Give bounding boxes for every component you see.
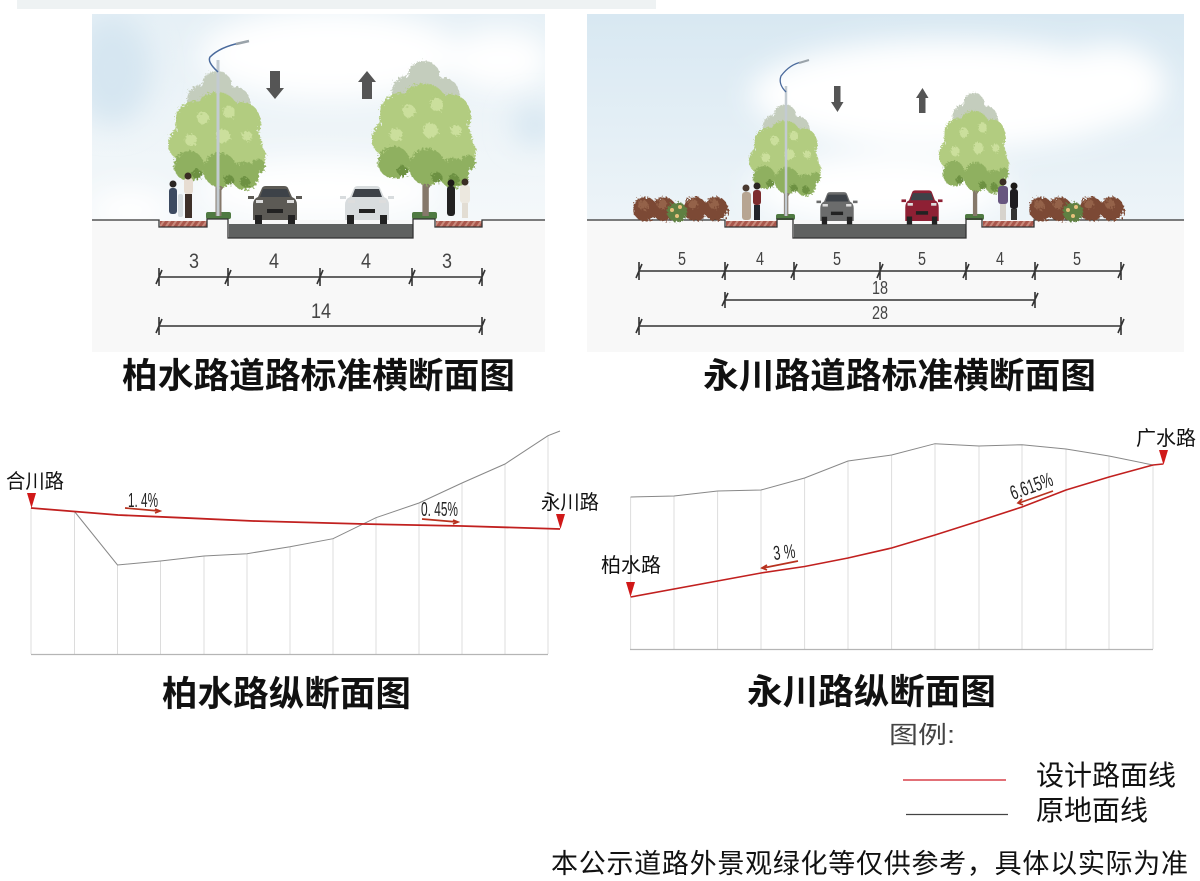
shrubs left — [633, 197, 728, 222]
grid lines — [631, 444, 1153, 649]
dimension row 3 4 4 3 — [156, 250, 485, 286]
chart: 永川路 longitudinal profile — [601, 427, 1196, 650]
street cross-section profile — [92, 212, 545, 238]
street lamp — [780, 60, 809, 216]
tree right — [372, 61, 476, 216]
heading: 永川路纵断面图: 永川路纵断面图 — [747, 673, 996, 712]
dimension total 18 — [722, 278, 1038, 308]
dimension total 28: 28 — [872, 303, 888, 323]
slope 3%: 3 % — [772, 541, 797, 565]
heading: 柏水路道路标准横断面图: 柏水路道路标准横断面图 — [122, 357, 515, 396]
dimension row 3 4 4 3: 3 — [442, 250, 452, 273]
dimension row 5 4 5 5 4 5: 5 — [678, 249, 686, 269]
legend — [889, 722, 1176, 826]
marker 广水路: 广水路 — [1136, 427, 1196, 450]
marker 广水路 — [1136, 427, 1196, 465]
tree right — [939, 93, 1009, 216]
note: 本公示道路外景观绿化等仅供参考，具体以实际为准 — [551, 849, 1188, 879]
pedestrians right — [998, 178, 1018, 220]
shrubs right — [1029, 197, 1124, 222]
marker 柏水路 — [601, 554, 661, 597]
slope 6.615%: 6.615% — [1007, 469, 1056, 505]
tree left — [168, 71, 266, 216]
design road line — [631, 464, 1163, 597]
dimension row 3 4 4 3: 4 — [361, 250, 371, 273]
slope 3% — [762, 541, 798, 570]
marker 合川路: 合川路 — [6, 470, 64, 493]
dimension row 3 4 4 3: 4 — [269, 250, 279, 273]
car right — [340, 186, 394, 224]
grid lines — [31, 436, 548, 654]
dimension row 5 4 5 5 4 5: 4 — [756, 249, 764, 269]
dimension row 3 4 4 3: 3 — [189, 250, 199, 273]
arrow down — [266, 71, 284, 99]
existing ground line — [74, 431, 560, 565]
street lamp — [209, 41, 249, 216]
dimension row 5 4 5 5 4 5: 5 — [918, 249, 926, 269]
design road line — [31, 508, 560, 529]
chart: 柏水路 longitudinal profile — [6, 431, 599, 654]
panel: 柏水路 cross section — [92, 14, 545, 335]
top strip — [17, 0, 656, 9]
legend: design road line: 设计路面线 — [1036, 760, 1176, 791]
dimension total 18: 18 — [872, 278, 888, 298]
sky background — [92, 14, 545, 220]
pedestrians left — [742, 182, 761, 220]
ground — [587, 220, 1184, 352]
dimension total 14 — [156, 300, 485, 335]
slope 0.45%: 0. 45% — [421, 499, 458, 521]
tree left — [749, 104, 821, 216]
slope 6.615% — [1007, 469, 1056, 505]
marker 柏水路: 柏水路 — [601, 554, 661, 577]
sky background — [587, 14, 1184, 225]
marker 永川路 — [541, 491, 599, 529]
slope 0.45% — [421, 499, 458, 524]
pedestrians right — [447, 178, 470, 218]
car left — [816, 192, 858, 224]
dimension row 5 4 5 5 4 5 — [636, 249, 1124, 280]
arrow up — [916, 88, 928, 113]
arrow down — [831, 86, 844, 112]
dimension total 14: 14 — [311, 300, 331, 323]
heading: 永川路道路标准横断面图: 永川路道路标准横断面图 — [703, 357, 1096, 396]
legend title: 图例: — [889, 722, 955, 749]
panel: 永川路 cross section — [587, 14, 1184, 352]
slope 1.4%: 1. 4% — [128, 490, 158, 512]
arrow up — [358, 71, 376, 99]
baseline — [630, 648, 1153, 650]
existing ground line — [631, 444, 1153, 497]
dimension row 5 4 5 5 4 5: 5 — [833, 249, 841, 269]
dimension row 5 4 5 5 4 5: 5 — [1073, 249, 1081, 269]
marker 永川路: 永川路 — [541, 491, 599, 514]
slope 1.4% — [125, 490, 160, 513]
dimension row 5 4 5 5 4 5: 4 — [996, 249, 1004, 269]
marker 合川路 — [6, 470, 64, 508]
street cross-section profile — [587, 214, 1184, 238]
heading: 柏水路纵断面图: 柏水路纵断面图 — [162, 675, 411, 714]
car left — [248, 186, 302, 224]
ground — [92, 220, 545, 352]
pedestrians left — [169, 172, 193, 218]
legend: existing ground line: 原地面线 — [1036, 795, 1148, 826]
dimension total 28 — [636, 303, 1124, 335]
car right — [901, 190, 943, 225]
baseline — [31, 654, 548, 656]
